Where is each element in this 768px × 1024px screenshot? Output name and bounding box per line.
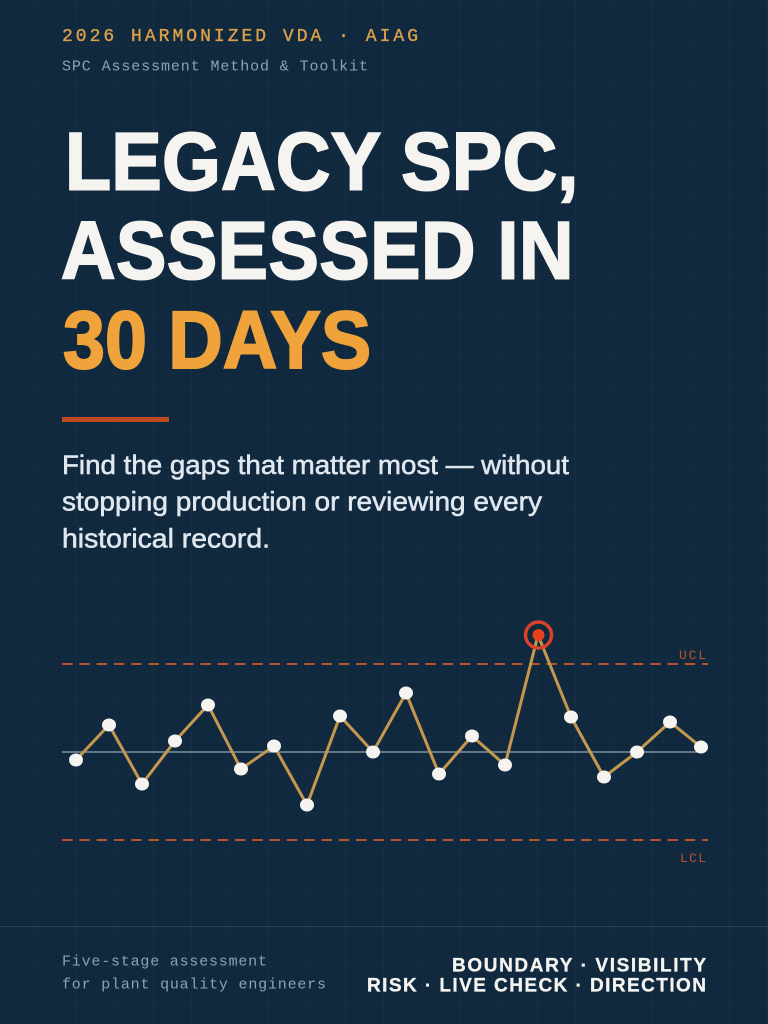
subheading: toolkit: SPC Assessment Method & Toolkit (62, 58, 368, 76)
footer divider (0, 926, 768, 928)
data line (76, 635, 701, 805)
title (61, 116, 578, 386)
title: LEGACY SPC, (65, 116, 578, 207)
centre line (62, 751, 704, 753)
footer stages: BOUNDARY · VISIBILITY (452, 956, 706, 976)
upper control limit (62, 663, 708, 665)
footer stages (367, 956, 706, 996)
footer note: Five-stage assessment (62, 954, 267, 970)
description: stopping production or reviewing every (62, 486, 543, 516)
footer stages: RISK · LIVE CHECK · DIRECTION (367, 976, 706, 996)
description: Find the gaps that matter most — without (62, 450, 570, 480)
data points (69, 686, 708, 812)
description: historical record. (62, 524, 270, 554)
accent rule (62, 417, 169, 422)
title: 30 DAYS (63, 294, 371, 386)
description (62, 450, 570, 554)
lower control limit (62, 839, 708, 841)
LCL label: LCL (680, 851, 706, 866)
UCL label: UCL (679, 648, 706, 663)
control chart (62, 622, 708, 866)
footer note (62, 954, 326, 994)
eyebrow: 2026 HARMONIZED VDA · AIAG (62, 27, 418, 47)
out-of-control point (526, 622, 552, 648)
title: ASSESSED IN (61, 205, 573, 296)
footer note: for plant quality engineers (62, 976, 326, 994)
